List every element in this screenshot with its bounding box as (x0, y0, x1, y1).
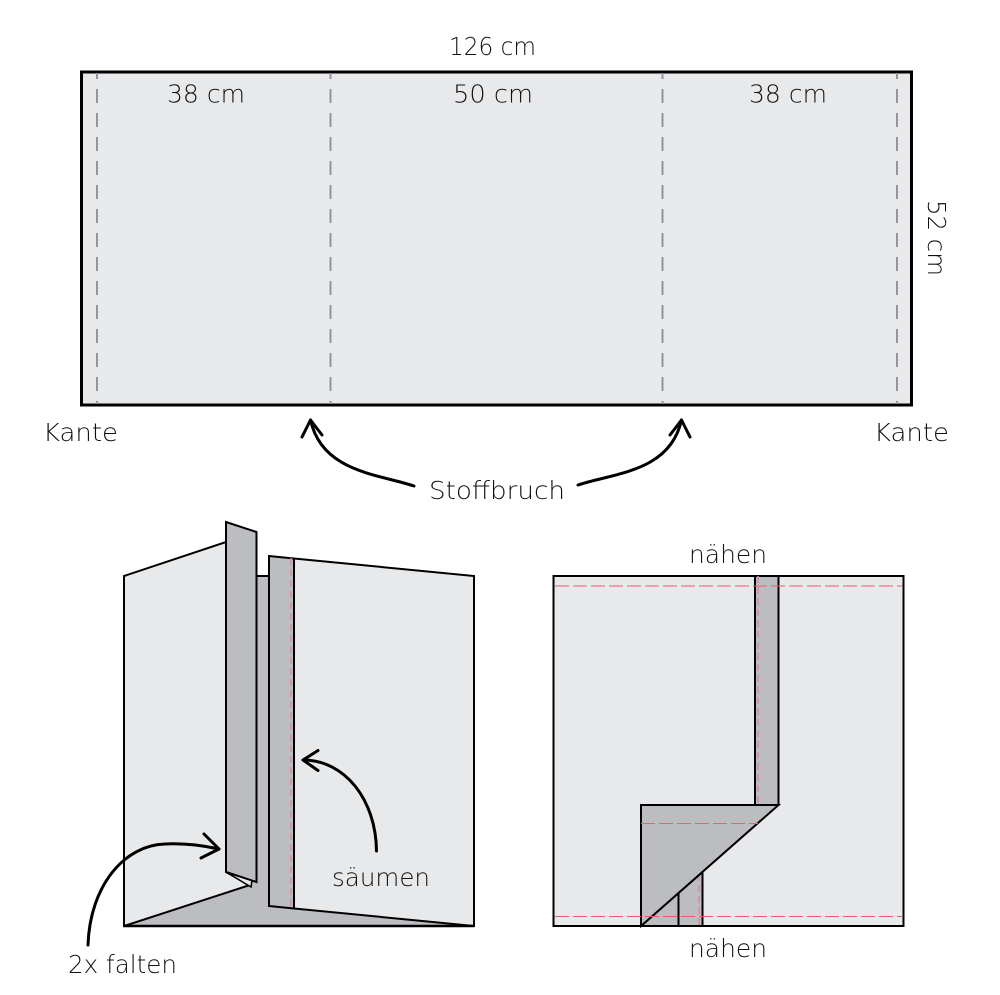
height label: 52 cm: 52 cm (922, 200, 951, 276)
sewn square (554, 576, 904, 926)
right fabric panel (294, 558, 474, 926)
bottom edge (124, 925, 474, 927)
section label: right 38 cm: 38 cm (749, 80, 827, 108)
arrow: Stoffbruch to left fold (302, 420, 414, 486)
small fold tip (226, 872, 252, 887)
section label: 50 cm: 50 cm (453, 80, 533, 108)
label: nähen top: nähen (689, 540, 767, 569)
hem stitch line (290, 558, 292, 908)
left fabric panel (124, 542, 250, 926)
lower strip right (678, 872, 702, 926)
fabric rectangle (82, 72, 912, 405)
label: 2x falten: 2x falten (68, 950, 177, 979)
arrow: säumen to hem (303, 750, 376, 851)
inner gray back of fabric (124, 576, 474, 926)
panel: fabric cutting plan (82, 32, 951, 405)
label: Stoffbruch: Stoffbruch (429, 476, 565, 505)
right hem strip (269, 556, 294, 908)
vertical stitches (699, 576, 758, 926)
label: Kante left: Kante (43, 418, 118, 447)
bottom seam (555, 916, 902, 918)
panel: sewing diagram (554, 576, 904, 926)
label: Kante right: Kante (874, 418, 949, 447)
label: nähen bottom: nähen (689, 934, 767, 963)
folded triangle (641, 805, 778, 926)
fold and edge dashed lines (97, 73, 897, 404)
inner fold dashes (641, 822, 758, 824)
section label: left 38 cm: 38 cm (167, 80, 245, 108)
width label: 126 cm: 126 cm (449, 32, 536, 61)
top seam (555, 585, 902, 587)
arrow: Stoffbruch to right fold (578, 420, 690, 485)
left folded strip (226, 522, 256, 882)
arrow: 2x falten to strip (88, 834, 219, 945)
upper strip (755, 576, 778, 805)
label: säumen: säumen (332, 863, 430, 892)
lower strip left (641, 893, 678, 926)
panel: folded hem diagram (124, 522, 474, 926)
